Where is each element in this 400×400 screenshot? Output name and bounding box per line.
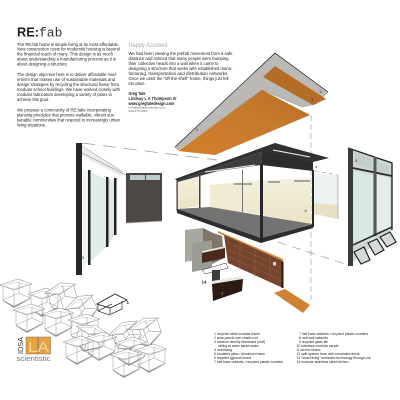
legend: column two: 14 modular stainless steel kitchen [296, 360, 349, 364]
text block: credits: www.gregtatedesign.com [128, 101, 174, 106]
legend: column two: 7 mdf base cabinets / recycled plastic counters [299, 332, 368, 336]
highlighted module [97, 294, 130, 315]
text block: introduction: The design objective here is to deliver affordable mod- [17, 72, 117, 77]
text block: introduction: The RE:fab home is simple living at its most affordable. [17, 42, 119, 47]
text block: introduction: New construction costs for modernist housing is beyond [17, 47, 120, 52]
highlighted module: 1 [126, 300, 130, 305]
text block: introduction: planning principles that promote walkable, vibrant sus- [17, 113, 115, 118]
text block: Happy Accident story [128, 51, 233, 86]
fixtures: gypsum panels, cabinets and kitchen: 11 [186, 259, 191, 264]
text block: introduction [17, 42, 120, 128]
fixtures: gypsum panels, cabinets and kitchen [185, 228, 243, 301]
legend: column one: 2 solar panels over elastic roof [214, 336, 258, 340]
fixtures: gypsum panels, cabinets and kitchen: 14 [202, 280, 207, 284]
text block: Happy Accident story: We had been viewing the prefab movement from a safe [128, 51, 233, 56]
legend: column one: 5 insulated glass / aluminum frame [214, 352, 265, 356]
text block: credits [128, 91, 177, 113]
logo: iDSA LA scientistic: IDSA [18, 337, 25, 354]
roof panel: grey elastic roof and wood ceiling [175, 53, 328, 155]
logo: iDSA LA scientistic: LA [28, 339, 49, 356]
heading: Happy Accident: Happy Accident [128, 43, 168, 49]
text block: Happy Accident story: Once we used the "off-the-shelf" frame, things just fell [128, 76, 228, 81]
legend: column one: 6 recycled gypsum board [214, 356, 251, 360]
text block: Happy Accident story: their collective heads into a wall when it came to [128, 61, 219, 66]
text block: credits: info@gregtatedesign.com [128, 106, 166, 110]
text block: introduction: We propose a community of RE:fabs incorporating [17, 108, 111, 112]
text block: introduction: living situations. [17, 123, 46, 128]
roof panel: grey elastic roof and wood ceiling: 3 [196, 127, 198, 132]
text block: credits: 949.275.0587 [128, 109, 148, 113]
text block: credits: Lindsay L A Thompson IV [128, 96, 177, 101]
legend: column one: 3 medium density fiberboard (mdf) [214, 340, 265, 344]
text block: introduction: achieve this goal. [17, 97, 49, 102]
left window wall: 5 [82, 255, 85, 260]
text block: introduction: modular school buildings. We have worked closely with [17, 87, 120, 92]
community of modules wireframe cluster [0, 279, 167, 378]
legend: column two: 10 interface modular carpet [296, 344, 339, 348]
text block: introduction: design strategies by recycling the structural frame from [17, 82, 119, 87]
text block: credits: Greg Tate [128, 91, 146, 96]
floor board [274, 289, 310, 313]
brick wall [218, 231, 284, 288]
right window wall: 5 [355, 158, 358, 163]
legend: column two: 13 "smart living" embeded technology through-out [296, 356, 371, 360]
legend: column one: 1 recycled steel modular frame [214, 332, 260, 336]
module frame with floor and walls: 6 [304, 208, 308, 213]
awning windows [353, 227, 396, 264]
legend: column two: 11 low flow fixtures [296, 348, 321, 352]
legend: column one [214, 332, 283, 364]
text block: Happy Accident story: facturing, transportation and distribution networks. [128, 71, 228, 76]
legend: column two [296, 332, 371, 364]
text block: introduction: tainable communities that respond to increasingly urban [17, 118, 120, 123]
text block: Happy Accident story: distance and noticed that many people were bumping [128, 56, 229, 61]
left window wall [76, 143, 126, 275]
text block: introduction: ernism that makes use of sustainable materials and [17, 77, 115, 82]
legend: column one: 7 mdf base cabinets / recycled plastic counters [214, 360, 283, 364]
text block: Happy Accident story: designing a structure that works with established manu- [128, 66, 233, 71]
text block: Happy Accident story: into place. [128, 81, 146, 86]
legend: column one: 4 overhang [214, 348, 232, 352]
module frame with floor and walls: 4 [315, 164, 318, 169]
dashed assembly guides [82, 115, 348, 300]
right window wall [348, 148, 392, 266]
legend: column one: ceiling w/ water based sealer [218, 344, 260, 348]
text block: introduction: modular fabricators developing a variety of plans to [17, 92, 112, 97]
roof panel: grey elastic roof and wood ceiling: 2 [320, 89, 322, 94]
text block: introduction: about understanding a manufacturing process as it is [17, 56, 117, 62]
logo: iDSA LA scientistic: scientistic [16, 356, 51, 363]
legend: column two: 12 split system hvac with concealed ducts [296, 352, 360, 356]
legend: column two: 9 recycled glass tile [299, 340, 328, 344]
loose glass panel [314, 174, 338, 219]
text block: introduction: the financial reach of many. This design is as much [17, 52, 113, 57]
title: RE:fab [17, 24, 62, 40]
text block: introduction: about designing a structure. [17, 62, 68, 66]
fixtures: gypsum panels, cabinets and kitchen: 7 [221, 291, 224, 296]
legend: column two: 8 mdf wall cabinets [299, 336, 328, 340]
roof panel: grey elastic roof and wood ceiling: 3 [311, 97, 314, 102]
back dark wall panel [126, 173, 162, 223]
logo: iDSA LA scientistic [16, 337, 51, 363]
module frame with floor and walls [175, 143, 329, 243]
